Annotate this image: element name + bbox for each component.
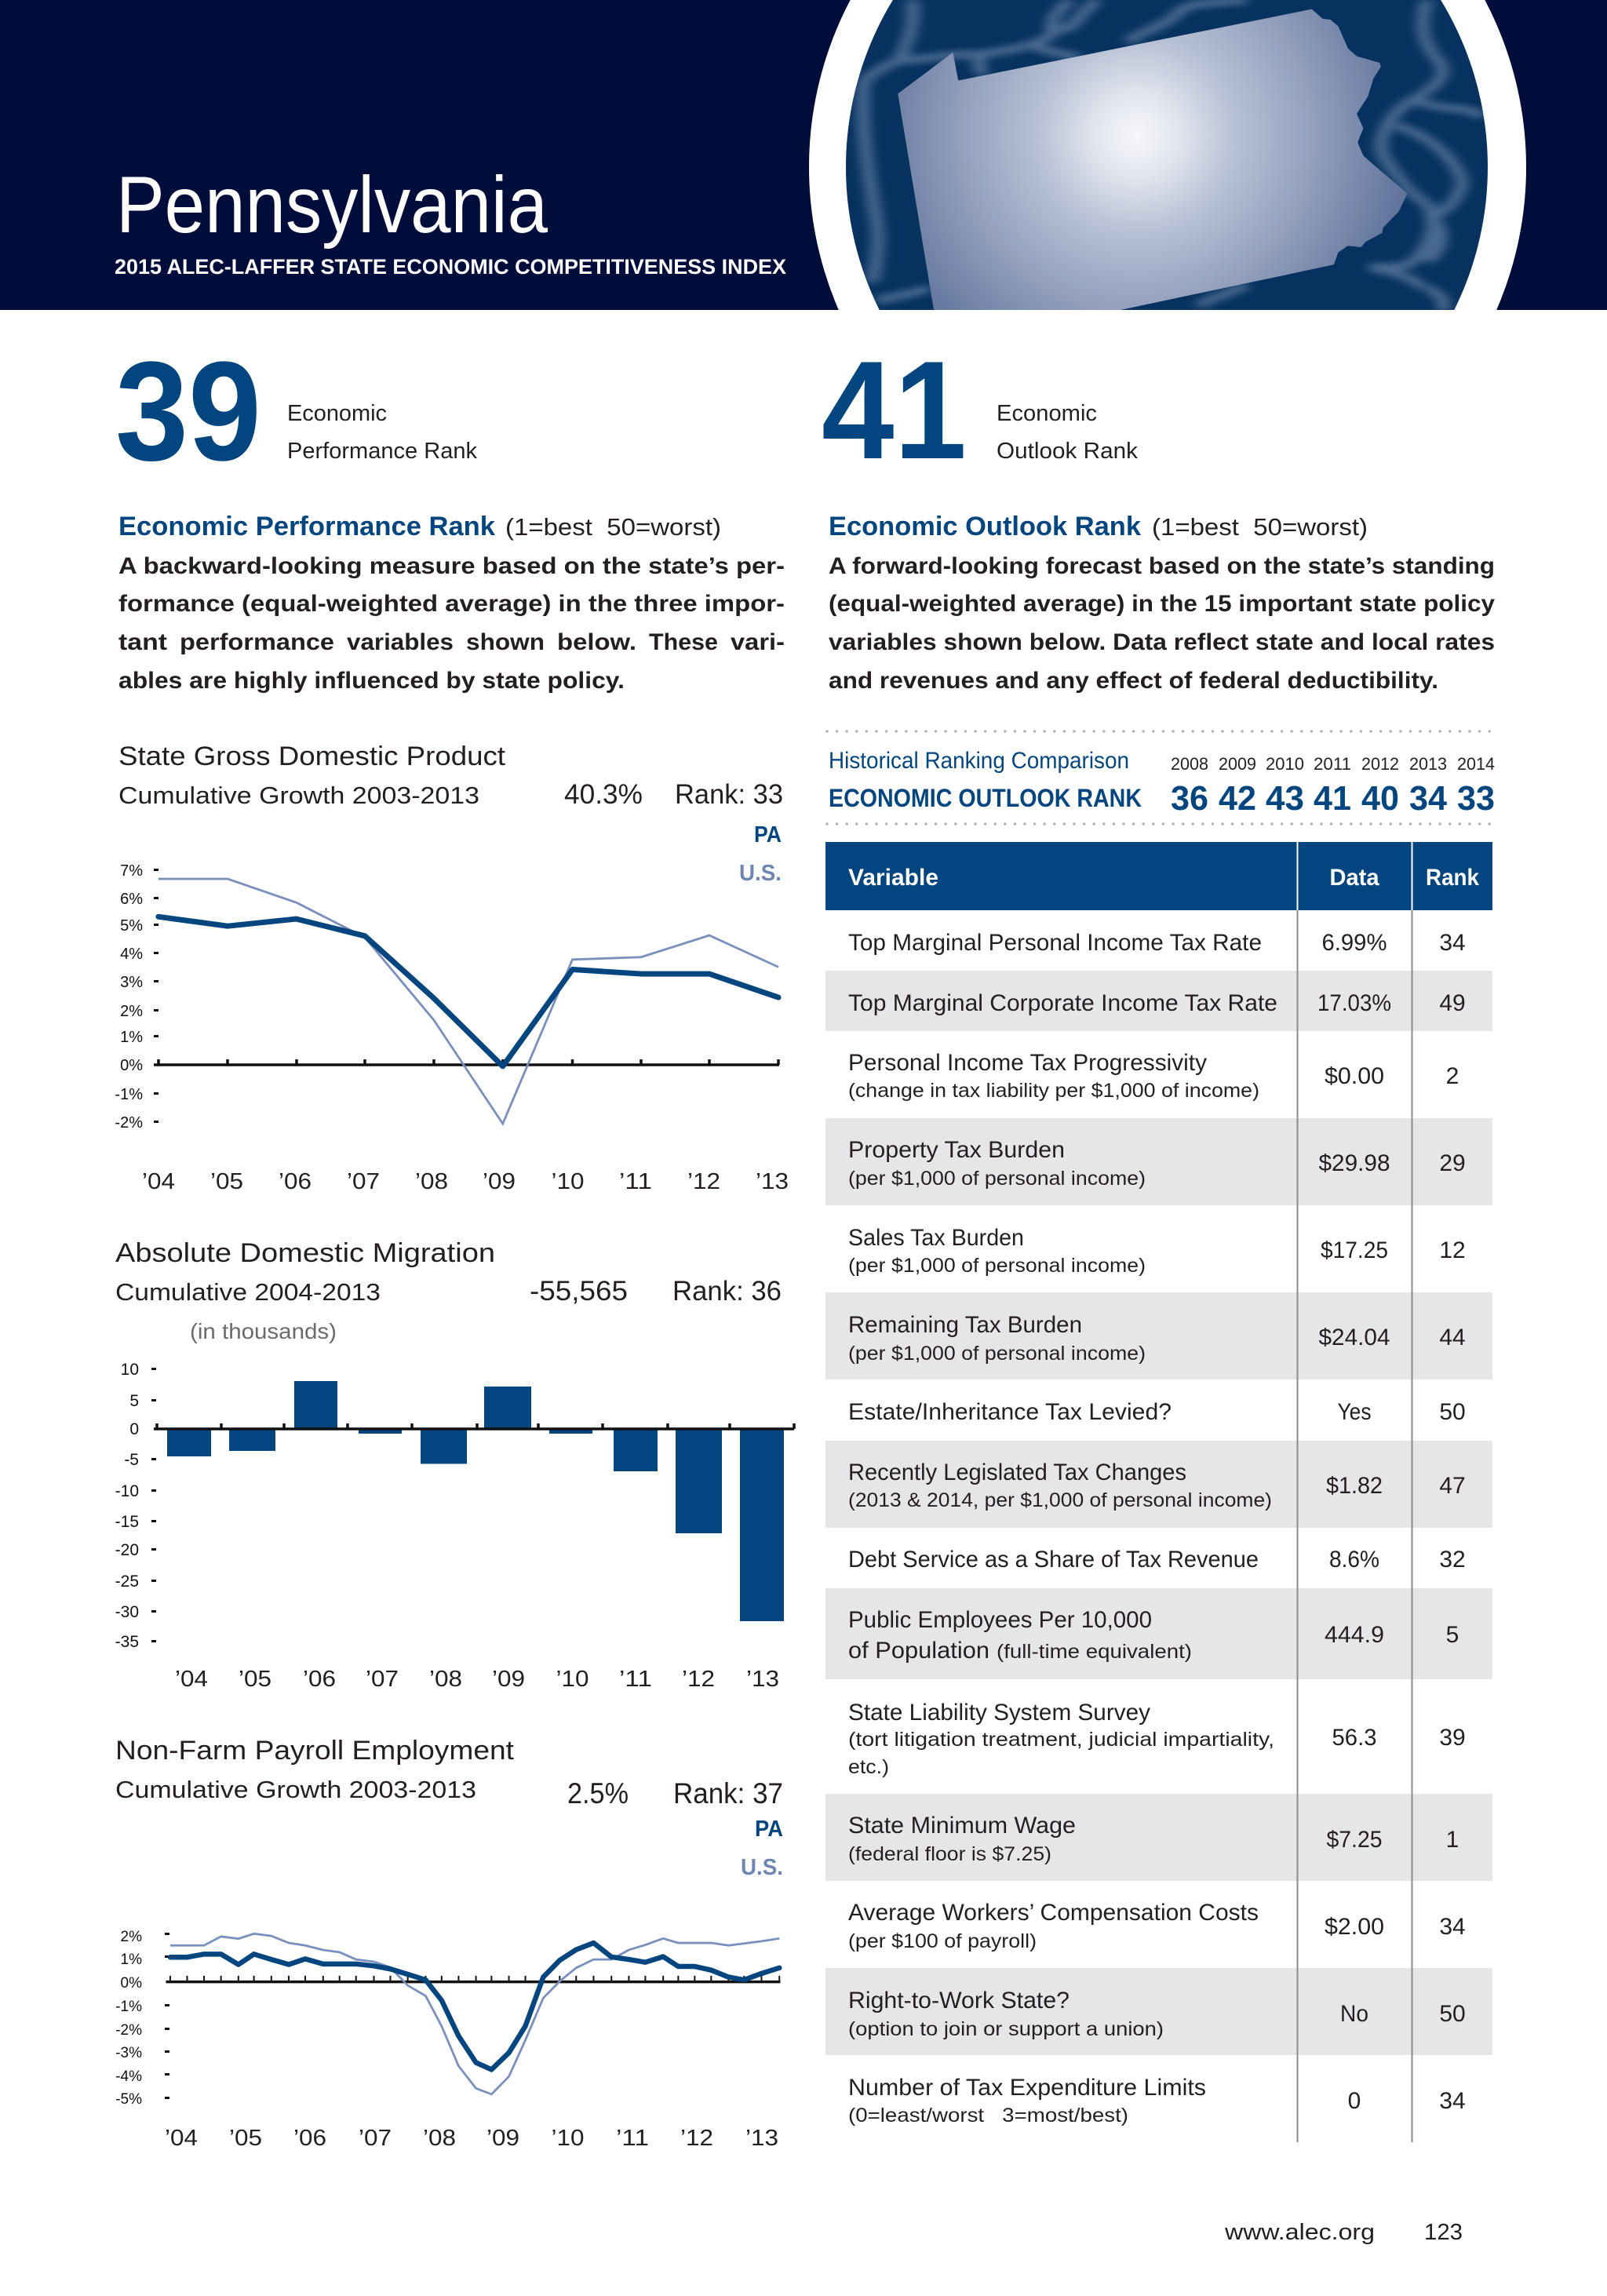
x axis years bbox=[175, 1667, 779, 1692]
text block: performance rank description: Economic Performance Rank bbox=[118, 512, 495, 541]
y axis: -5 bbox=[124, 1451, 139, 1469]
x axis years: ’10 bbox=[556, 1667, 589, 1692]
chart heading: Non-Farm Payroll Employment bbox=[115, 1736, 515, 1766]
x axis years: ’10 bbox=[551, 2126, 584, 2151]
row: debt service: 32 bbox=[1439, 1547, 1466, 1573]
x axis years: ’05 bbox=[210, 1169, 243, 1194]
row: tax expenditure limits bbox=[848, 2075, 1466, 2127]
state silhouette bbox=[898, 9, 1408, 312]
x axis years: ’08 bbox=[429, 1667, 462, 1692]
row: recently legislated tax changes: 47 bbox=[1439, 1473, 1466, 1499]
table header: Variable bbox=[848, 865, 938, 891]
row: right-to-work: No bbox=[1340, 2001, 1368, 2027]
chart heading: Absolute Domestic Migration bbox=[115, 1238, 495, 1268]
row: tax expenditure limits: 0 bbox=[1348, 2088, 1361, 2114]
x axis years bbox=[165, 2126, 778, 2151]
chart heading: State Gross Domestic Product bbox=[118, 742, 506, 771]
row: personal income tax progressivity: 2 bbox=[1446, 1063, 1459, 1089]
state name title: Pennsylvania bbox=[116, 160, 548, 250]
x axis years: ’11 bbox=[619, 1667, 652, 1692]
row: top marginal personal income tax rate: 34 bbox=[1439, 930, 1466, 956]
y axis: 2% bbox=[121, 1929, 142, 1945]
footer: www.alec.org bbox=[1224, 2220, 1375, 2245]
row: state minimum wage: $7.25 bbox=[1326, 1827, 1383, 1853]
row: top marginal corporate income tax rate: Top Marginal Corporate Income Tax Rate bbox=[848, 990, 1277, 1016]
footer: 123 bbox=[1424, 2220, 1463, 2245]
row: state minimum wage: State Minimum Wage bbox=[848, 1813, 1076, 1839]
index subtitle: 2015 ALEC-LAFFER STATE ECONOMIC COMPETITIVENESS INDEX bbox=[115, 255, 786, 279]
chart heading: 2.5% bbox=[567, 1777, 629, 1809]
text block: performance rank description: (1=best 50=worst) bbox=[505, 513, 721, 541]
row: estate/inheritance tax: 50 bbox=[1439, 1399, 1466, 1425]
y axis: 10 bbox=[121, 1361, 139, 1379]
years row: 2014 bbox=[1457, 754, 1495, 774]
chart heading bbox=[115, 1736, 783, 1809]
x axis years bbox=[142, 1169, 789, 1194]
y axis: -10 bbox=[115, 1482, 139, 1500]
legend: U.S. bbox=[739, 861, 782, 886]
x axis years: ’07 bbox=[366, 1667, 399, 1692]
table row stripes bbox=[825, 971, 1492, 2055]
text block: performance rank description: shown bbox=[466, 629, 545, 655]
row: right-to-work: 50 bbox=[1439, 2001, 1466, 2027]
row: state liability system survey: State Liability System Survey bbox=[848, 1700, 1150, 1726]
y axis: 7% bbox=[120, 862, 143, 880]
text block: performance rank description: below. bbox=[557, 629, 636, 655]
y axis bbox=[115, 862, 159, 1132]
x axis years: ’09 bbox=[486, 2126, 519, 2151]
x axis years: ’12 bbox=[687, 1169, 720, 1194]
zero axis bbox=[154, 1059, 779, 1065]
row: state liability system survey: (tort litigation treatment, judicial impartiality, bbox=[848, 1729, 1274, 1751]
row: remaining tax burden: 44 bbox=[1439, 1325, 1466, 1350]
chart: absolute domestic migration bbox=[115, 1238, 794, 1692]
chart heading: (in thousands) bbox=[190, 1319, 337, 1343]
years row: 2011 bbox=[1314, 754, 1351, 774]
row: workers compensation bbox=[848, 1900, 1466, 1952]
row: sales tax burden: (per $1,000 of personal income) bbox=[848, 1255, 1146, 1277]
row: personal income tax progressivity: Personal Income Tax Progressivity bbox=[848, 1050, 1207, 1076]
y axis: -1% bbox=[115, 1999, 142, 2015]
y axis: 1% bbox=[120, 1029, 143, 1046]
legend bbox=[739, 822, 782, 886]
years row: 2013 bbox=[1409, 754, 1447, 774]
chart heading: 40.3% bbox=[564, 779, 643, 810]
x axis years: ’08 bbox=[423, 2126, 456, 2151]
years row: 2010 bbox=[1266, 754, 1304, 774]
text block: outlook rank description: and revenues and any effect of federal deductibility. bbox=[829, 668, 1438, 694]
y axis: -35 bbox=[115, 1633, 139, 1651]
PA line bbox=[159, 917, 778, 1066]
row: remaining tax burden: (per $1,000 of personal income) bbox=[848, 1343, 1146, 1365]
x axis years: ’06 bbox=[293, 2126, 326, 2151]
row: state liability system survey bbox=[848, 1700, 1466, 1778]
x axis years: ’05 bbox=[229, 2126, 262, 2151]
chart heading bbox=[115, 1238, 782, 1343]
chart heading: Rank: 37 bbox=[673, 1777, 783, 1809]
U.S. line bbox=[159, 879, 778, 1124]
row: public employees bbox=[848, 1607, 1459, 1664]
x axis years: ’13 bbox=[756, 1169, 789, 1194]
legend: PA bbox=[755, 1817, 783, 1842]
x axis years: ’09 bbox=[492, 1667, 525, 1692]
row: top marginal personal income tax rate bbox=[848, 930, 1466, 956]
x axis years: ’06 bbox=[279, 1169, 312, 1194]
row: public employees: of Population bbox=[848, 1638, 989, 1664]
economic outlook rank badge: Economic bbox=[997, 401, 1097, 426]
text block: performance rank description: A backward-looking measure based on the state’s per- bbox=[118, 553, 785, 579]
zero axis with quarterly ticks bbox=[166, 1976, 780, 1982]
text block: performance rank description: ables are highly influenced by state policy. bbox=[118, 668, 625, 694]
y axis: -20 bbox=[115, 1541, 139, 1559]
legend: PA bbox=[754, 822, 782, 847]
y axis: -15 bbox=[115, 1513, 139, 1531]
y axis: 5% bbox=[120, 917, 143, 935]
years row: 2008 bbox=[1171, 754, 1208, 774]
row: recently legislated tax changes: (2013 & 2014, per $1,000 of personal income) bbox=[848, 1489, 1272, 1511]
row: workers compensation: $2.00 bbox=[1325, 1914, 1384, 1940]
zero axis bbox=[154, 1423, 794, 1429]
years row: 2012 bbox=[1361, 754, 1399, 774]
economic performance rank badge bbox=[115, 333, 477, 490]
row: workers compensation: (per $100 of payroll) bbox=[848, 1930, 1037, 1952]
x axis years: ’04 bbox=[175, 1667, 208, 1692]
row: top marginal personal income tax rate: 6.99% bbox=[1321, 930, 1387, 956]
row: recently legislated tax changes: $1.82 bbox=[1326, 1473, 1383, 1499]
y axis: 0 bbox=[129, 1420, 139, 1438]
economic outlook rank badge bbox=[822, 332, 1139, 488]
y axis: -2% bbox=[115, 2022, 142, 2039]
row: personal income tax progressivity: $0.00 bbox=[1325, 1063, 1384, 1089]
row: personal income tax progressivity bbox=[848, 1050, 1459, 1102]
row: remaining tax burden bbox=[848, 1312, 1466, 1365]
x axis years: ’06 bbox=[303, 1667, 336, 1692]
header banner bbox=[0, 0, 1607, 310]
years row: 2009 bbox=[1219, 754, 1256, 774]
chart heading: -55,565 bbox=[530, 1276, 628, 1307]
x axis years: ’08 bbox=[415, 1169, 448, 1194]
x axis years: ’07 bbox=[359, 2126, 392, 2151]
rank values row: 43 bbox=[1266, 779, 1304, 818]
years row bbox=[1171, 754, 1495, 774]
row: estate/inheritance tax: Yes bbox=[1337, 1399, 1372, 1425]
footer bbox=[1224, 2220, 1463, 2245]
text block: performance rank description: vari- bbox=[731, 629, 785, 655]
rank values row: 33 bbox=[1457, 779, 1495, 818]
x axis years: ’11 bbox=[616, 2126, 649, 2151]
table header: Rank bbox=[1426, 865, 1479, 891]
bars bbox=[167, 1381, 784, 1621]
rank values row bbox=[1171, 779, 1495, 818]
x axis years: ’13 bbox=[746, 1667, 779, 1692]
row: workers compensation: Average Workers’ Compensation Costs bbox=[848, 1900, 1259, 1926]
row: top marginal corporate income tax rate: 17.03% bbox=[1317, 990, 1391, 1016]
row: debt service: 8.6% bbox=[1329, 1547, 1379, 1573]
rank values row: 40 bbox=[1361, 779, 1399, 818]
row: property tax burden bbox=[848, 1137, 1466, 1190]
chart: non-farm payroll employment bbox=[115, 1736, 783, 2151]
row: recently legislated tax changes bbox=[848, 1460, 1466, 1511]
chart heading: Rank: 33 bbox=[675, 779, 783, 810]
row: state liability system survey: etc.) bbox=[848, 1756, 889, 1778]
y axis: -4% bbox=[115, 2068, 142, 2085]
text block: outlook rank description: (equal-weighted average) in the 15 important state policy bbox=[829, 591, 1495, 617]
historical ranking comparison: Historical Ranking Comparison bbox=[829, 748, 1129, 774]
chart heading: Rank: 36 bbox=[672, 1276, 782, 1307]
legend bbox=[741, 1817, 783, 1880]
row: remaining tax burden: Remaining Tax Burden bbox=[848, 1312, 1082, 1338]
chart heading bbox=[118, 742, 783, 810]
chart: state gross domestic product bbox=[115, 742, 789, 1194]
x axis years: ’04 bbox=[165, 2126, 198, 2151]
text block: performance rank description: These bbox=[649, 629, 718, 655]
x axis years: ’04 bbox=[142, 1169, 175, 1194]
x axis years: ’12 bbox=[682, 1667, 715, 1692]
y axis bbox=[115, 1361, 156, 1651]
text block: outlook rank description bbox=[829, 512, 1495, 694]
y axis: 0% bbox=[121, 1975, 142, 1992]
row: state liability system survey: 39 bbox=[1439, 1725, 1466, 1751]
row: public employees: (full-time equivalent) bbox=[997, 1641, 1192, 1663]
row: tax expenditure limits: 34 bbox=[1439, 2088, 1466, 2114]
y axis: 2% bbox=[120, 1003, 143, 1020]
row: remaining tax burden: $24.04 bbox=[1318, 1325, 1390, 1350]
row: state minimum wage bbox=[848, 1813, 1459, 1865]
row: recently legislated tax changes: Recently Legislated Tax Changes bbox=[848, 1460, 1186, 1485]
row: debt service: Debt Service as a Share of Tax Revenue bbox=[848, 1547, 1259, 1573]
row: right-to-work: Right-to-Work State? bbox=[848, 1988, 1070, 2014]
y axis: -2% bbox=[115, 1114, 143, 1132]
text block: outlook rank description: A forward-looking forecast based on the state’s standing bbox=[829, 553, 1495, 579]
text block: performance rank description: performance bbox=[180, 629, 334, 655]
text block: outlook rank description: Economic Outlook Rank bbox=[829, 512, 1141, 541]
y axis: -25 bbox=[115, 1573, 139, 1591]
policy variable table bbox=[825, 842, 1492, 2142]
x axis years: ’13 bbox=[745, 2126, 778, 2151]
row: state minimum wage: 1 bbox=[1446, 1827, 1459, 1853]
row: workers compensation: 34 bbox=[1439, 1914, 1466, 1940]
y axis: -30 bbox=[115, 1603, 139, 1621]
U.S. line bbox=[170, 1933, 779, 2094]
rank values row: 34 bbox=[1409, 779, 1448, 818]
y axis: -1% bbox=[115, 1086, 143, 1103]
row: property tax burden: (per $1,000 of personal income) bbox=[848, 1168, 1146, 1190]
rank values row: 36 bbox=[1171, 779, 1208, 818]
row: property tax burden: $29.98 bbox=[1318, 1150, 1390, 1176]
text block: outlook rank description: variables shown below. Data reflect state and local rates bbox=[829, 629, 1495, 655]
y axis: -3% bbox=[115, 2045, 142, 2061]
economic performance rank badge: Economic bbox=[287, 401, 387, 426]
chart heading: Cumulative Growth 2003-2013 bbox=[115, 1776, 476, 1803]
row: property tax burden: Property Tax Burden bbox=[848, 1137, 1065, 1163]
historical ranking comparison bbox=[827, 731, 1495, 824]
text block: performance rank description bbox=[118, 512, 785, 694]
text block: performance rank description: variables bbox=[347, 629, 454, 655]
economic outlook rank badge: 41 bbox=[822, 332, 967, 488]
economic outlook rank badge: Outlook Rank bbox=[997, 439, 1139, 464]
row: tax expenditure limits: (0=least/worst 3=most/best) bbox=[848, 2105, 1128, 2127]
y axis: 3% bbox=[120, 974, 143, 991]
row: top marginal personal income tax rate: Top Marginal Personal Income Tax Rate bbox=[848, 930, 1262, 956]
PA line bbox=[170, 1943, 779, 2069]
rank values row: 41 bbox=[1314, 779, 1351, 818]
text block: outlook rank description: (1=best 50=worst) bbox=[1152, 513, 1368, 541]
row: public employees: Public Employees Per 10,000 bbox=[848, 1607, 1152, 1633]
row: debt service bbox=[848, 1547, 1466, 1573]
row: estate/inheritance tax: Estate/Inheritance Tax Levied? bbox=[848, 1399, 1172, 1425]
legend: U.S. bbox=[741, 1855, 783, 1880]
chart heading: Cumulative Growth 2003-2013 bbox=[118, 782, 479, 809]
row: top marginal corporate income tax rate: 49 bbox=[1439, 990, 1466, 1016]
row: sales tax burden bbox=[848, 1225, 1466, 1277]
x axis years: ’09 bbox=[483, 1169, 516, 1194]
row: estate/inheritance tax bbox=[848, 1399, 1466, 1425]
row: tax expenditure limits: Number of Tax Expenditure Limits bbox=[848, 2075, 1206, 2101]
y axis: 1% bbox=[121, 1952, 142, 1968]
text block: performance rank description: formance (equal-weighted average) in the three impor- bbox=[118, 591, 785, 617]
row: state liability system survey: 56.3 bbox=[1332, 1725, 1376, 1751]
y axis: 4% bbox=[120, 946, 143, 963]
x axis years: ’12 bbox=[680, 2126, 713, 2151]
x axis years: ’05 bbox=[239, 1667, 271, 1692]
row: public employees: 5 bbox=[1446, 1622, 1459, 1648]
table header bbox=[825, 842, 1492, 910]
row: public employees: 444.9 bbox=[1325, 1622, 1384, 1648]
economic performance rank badge: 39 bbox=[115, 333, 261, 490]
y axis: 5 bbox=[129, 1392, 139, 1410]
row: sales tax burden: Sales Tax Burden bbox=[848, 1225, 1024, 1251]
x axis years: ’10 bbox=[551, 1169, 584, 1194]
y axis: 0% bbox=[120, 1057, 143, 1074]
chart heading: Cumulative 2004-2013 bbox=[115, 1278, 381, 1306]
row: sales tax burden: 12 bbox=[1439, 1237, 1466, 1263]
row: right-to-work bbox=[848, 1988, 1466, 2040]
rank values row: 42 bbox=[1219, 779, 1256, 818]
y axis: -5% bbox=[115, 2091, 142, 2108]
y axis bbox=[115, 1929, 169, 2108]
row: personal income tax progressivity: (change in tax liability per $1,000 of income) bbox=[848, 1080, 1259, 1102]
row: property tax burden: 29 bbox=[1439, 1150, 1466, 1176]
row: right-to-work: (option to join or support a union) bbox=[848, 2018, 1164, 2040]
economic performance rank badge: Performance Rank bbox=[287, 439, 477, 464]
x axis years: ’11 bbox=[619, 1169, 652, 1194]
x axis years: ’07 bbox=[347, 1169, 380, 1194]
historical ranking comparison: ECONOMIC OUTLOOK RANK bbox=[829, 784, 1142, 812]
row: top marginal corporate income tax rate bbox=[848, 990, 1466, 1016]
map medallion of Pennsylvania bbox=[809, 0, 1526, 310]
row: sales tax burden: $17.25 bbox=[1321, 1237, 1388, 1263]
y axis: 6% bbox=[120, 891, 143, 908]
row: state minimum wage: (federal floor is $7.25) bbox=[848, 1843, 1051, 1865]
text block: performance rank description: tant bbox=[118, 629, 167, 655]
table header: Data bbox=[1329, 865, 1379, 891]
